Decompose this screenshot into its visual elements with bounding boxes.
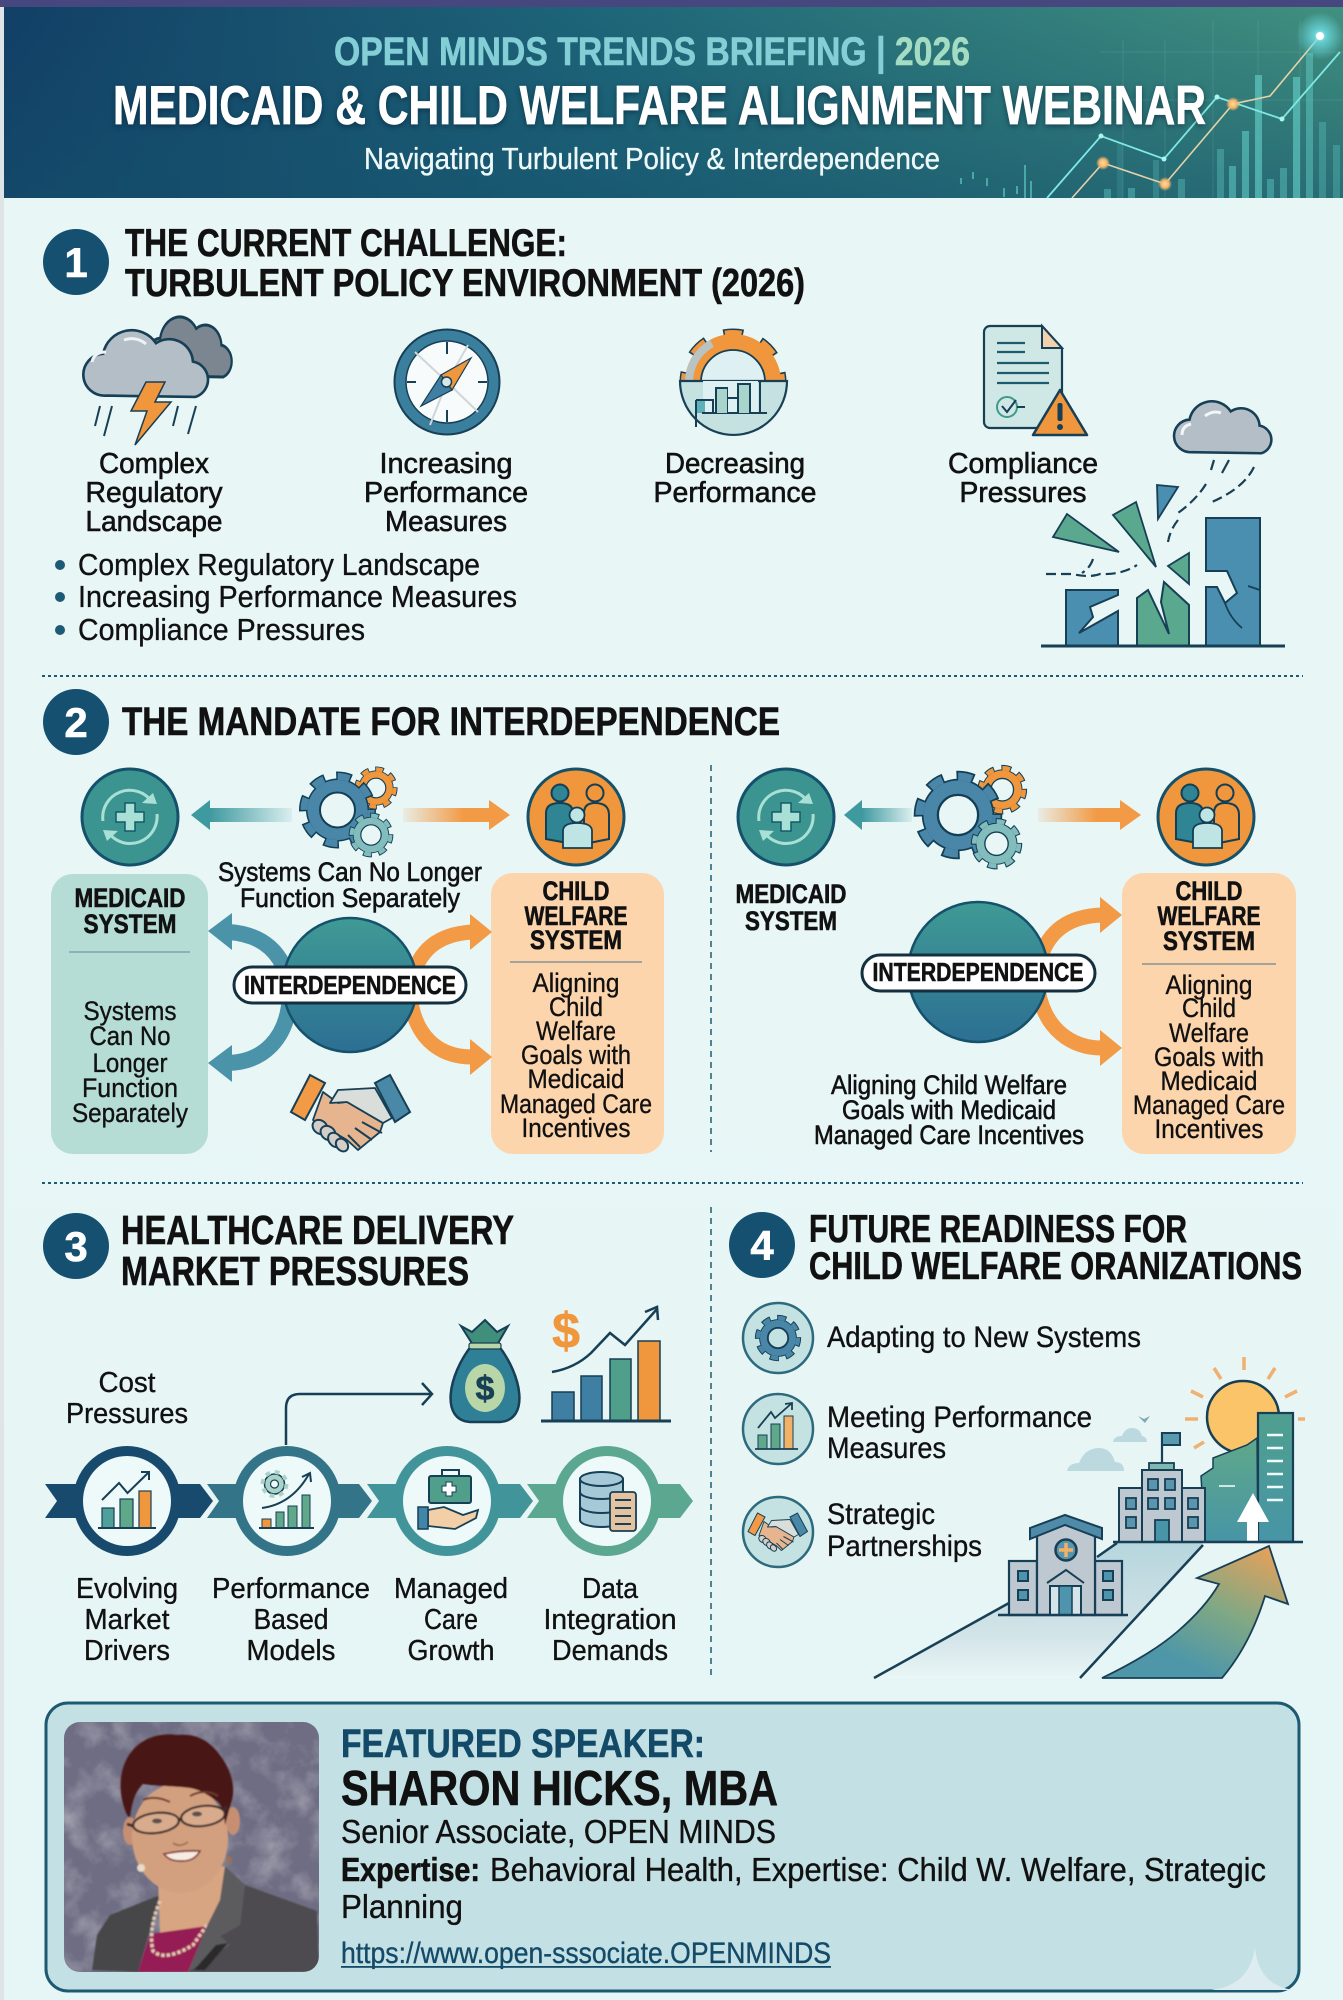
icon: compass xyxy=(394,330,500,434)
arrow to medicaid xyxy=(844,800,912,830)
caption: systems can no longer function separately: Function Separately xyxy=(240,883,460,913)
icon: child welfare circle xyxy=(528,769,624,865)
panel: child welfare system: CHILD xyxy=(1176,876,1242,906)
step labels xyxy=(76,1573,676,1667)
label: medicaid system xyxy=(736,879,846,936)
right diagram xyxy=(736,768,1296,1154)
panel: child welfare system: SYSTEM xyxy=(1163,926,1255,956)
section 4 number badge: 4 xyxy=(750,1222,774,1269)
label: decreasing performance: Decreasing xyxy=(665,448,805,480)
panel: child welfare system: Child xyxy=(1182,993,1236,1023)
big rising arrow xyxy=(1102,1546,1288,1678)
tall tower xyxy=(1258,1413,1293,1542)
connector arrow xyxy=(286,1383,432,1445)
header eyebrow: OPEN MINDS TRENDS BRIEFING | 2026 xyxy=(334,30,970,74)
label: medicaid system: MEDICAID xyxy=(736,879,846,909)
panel: child welfare system: CHILD xyxy=(542,876,610,906)
section 1 heading xyxy=(125,222,805,305)
text: adapting to new systems: Adapting to New Systems xyxy=(827,1321,1141,1354)
label: increasing performance measures: Performance xyxy=(364,477,528,509)
panel: child welfare system: SYSTEM xyxy=(530,925,622,955)
section 1 number badge xyxy=(43,229,109,295)
step labels: Managed xyxy=(394,1573,508,1605)
section 4: future readiness xyxy=(729,1208,1305,1678)
caption: aligning goals: Goals with Medicaid xyxy=(842,1095,1056,1125)
label: increasing performance measures xyxy=(364,448,528,538)
label: decreasing performance xyxy=(654,448,816,509)
panel: child welfare system: Incentives xyxy=(1154,1114,1264,1144)
section 3 heading xyxy=(121,1207,514,1294)
panel: child welfare system: Medicaid xyxy=(528,1064,624,1094)
icon: handshake xyxy=(291,1075,410,1154)
step: data integration demands xyxy=(558,1451,656,1551)
step labels: Growth xyxy=(408,1635,494,1667)
icon: medicaid circle xyxy=(738,769,834,865)
header chart decoration xyxy=(960,12,1343,198)
bullet list xyxy=(55,547,517,647)
section 3 heading: MARKET PRESSURES xyxy=(121,1248,469,1294)
section 2 number badge: 2 xyxy=(64,699,88,746)
arrow to child welfare xyxy=(1038,800,1141,830)
step labels: Evolving xyxy=(76,1573,178,1605)
icon: handshake badge xyxy=(743,1497,813,1567)
section 3: market pressures xyxy=(43,1207,693,1667)
panel: medicaid system: Can No xyxy=(90,1021,170,1051)
section 2: mandate for interdependence xyxy=(43,689,1296,1154)
chart: rising bars with dollar xyxy=(541,1303,671,1421)
label: compliance pressures xyxy=(948,448,1098,509)
icon: money bag xyxy=(451,1320,519,1422)
step labels: Performance xyxy=(212,1573,370,1605)
step labels: Care xyxy=(424,1604,478,1636)
header banner xyxy=(0,0,1343,198)
panel: child welfare system: Welfare xyxy=(1169,1018,1249,1048)
section 4 heading xyxy=(809,1208,1302,1288)
hub sphere with label: INTERDEPENDENCE xyxy=(244,970,456,1000)
speaker details: Behavioral Health, Expertise: Child W. Welfare, Strategic xyxy=(490,1851,1266,1888)
icon: gauge with bars xyxy=(680,334,787,435)
label: increasing performance measures: Increasing xyxy=(380,448,512,480)
section 1 number badge: 1 xyxy=(64,239,88,286)
bullet list: Increasing Performance Measures xyxy=(78,579,517,614)
step labels: Data xyxy=(582,1573,639,1605)
bullet list: Compliance Pressures xyxy=(78,612,365,647)
label: complex regulatory landscape: Complex xyxy=(99,448,209,480)
text: strategic partnerships xyxy=(827,1498,982,1563)
hub arrows xyxy=(1038,897,1122,1066)
panel: child welfare system: WELFARE xyxy=(1158,901,1260,931)
panel: child welfare system xyxy=(491,873,664,1154)
arrow to medicaid xyxy=(191,800,292,830)
hub sphere with label: INTERDEPENDENCE xyxy=(872,957,1084,987)
caption: aligning goals xyxy=(814,1070,1084,1150)
speaker details: https://www.open-sssociate.OPENMINDS xyxy=(341,1937,831,1970)
step labels: Market xyxy=(84,1604,170,1636)
caption: aligning goals: Aligning Child Welfare xyxy=(831,1070,1067,1100)
sun xyxy=(1185,1357,1305,1453)
panel: featured speaker xyxy=(46,1703,1299,1991)
text: meeting performance measures: Meeting Performance xyxy=(827,1401,1092,1434)
label: cost pressures: Pressures xyxy=(66,1398,188,1430)
label: increasing performance measures: Measures xyxy=(385,506,507,538)
panel: child welfare system xyxy=(1122,873,1296,1154)
panel: child welfare system: Medicaid xyxy=(1160,1066,1258,1096)
section 2 heading: THE MANDATE FOR INTERDEPENDENCE xyxy=(122,700,780,744)
label: compliance pressures: Compliance xyxy=(948,448,1098,480)
panel: medicaid system: SYSTEM xyxy=(84,909,176,939)
speaker details: Expertise: xyxy=(341,1851,480,1888)
icon: gear badge xyxy=(743,1303,813,1373)
panel: medicaid system: MEDICAID xyxy=(74,883,186,913)
icon: storm cloud xyxy=(83,317,232,445)
panel: child welfare system: WELFARE xyxy=(524,901,628,931)
speaker details xyxy=(341,1722,1266,1970)
text: meeting performance measures: Measures xyxy=(827,1432,946,1465)
panel: child welfare system: Incentives xyxy=(522,1113,630,1143)
icon: gears xyxy=(919,768,1024,866)
panel: medicaid system: Function xyxy=(82,1073,178,1103)
panel: medicaid system: Separately xyxy=(72,1098,188,1128)
panel: medicaid system xyxy=(51,874,208,1154)
panel: child welfare system: Managed Care xyxy=(1133,1090,1285,1120)
label: complex regulatory landscape xyxy=(86,448,223,538)
road xyxy=(874,1543,1203,1678)
panel: medicaid system: Longer xyxy=(92,1048,168,1078)
label: cost pressures: Cost xyxy=(98,1367,156,1399)
section 3 number badge xyxy=(43,1213,109,1279)
subtitle: Navigating Turbulent Policy & Interdependence xyxy=(364,141,940,176)
speaker photo xyxy=(64,1722,319,1972)
chart: rising bars with dollar: $ xyxy=(552,1303,580,1359)
step labels: Drivers xyxy=(84,1635,170,1667)
panel: child welfare system: Managed Care xyxy=(500,1089,652,1119)
panel: child welfare system: Welfare xyxy=(536,1016,616,1046)
illustration: growth path to city xyxy=(874,1357,1305,1678)
section 1 heading: THE CURRENT CHALLENGE: xyxy=(125,222,567,265)
section 1 heading: TURBULENT POLICY ENVIRONMENT (2026) xyxy=(125,262,805,305)
section 4 number badge xyxy=(729,1212,795,1278)
panel: child welfare system: Goals with xyxy=(1154,1042,1264,1072)
speaker details: Planning xyxy=(341,1888,463,1925)
label: complex regulatory landscape: Regulatory xyxy=(86,477,223,509)
step labels: Demands xyxy=(552,1635,668,1667)
label: compliance pressures: Pressures xyxy=(960,477,1086,509)
text: meeting performance measures xyxy=(827,1401,1092,1465)
icon: child welfare circle xyxy=(1158,769,1254,865)
label: medicaid system: SYSTEM xyxy=(745,906,837,936)
icon: compliance document with warning xyxy=(984,326,1087,435)
speaker details: FEATURED SPEAKER: xyxy=(341,1722,705,1766)
panel: child welfare system: Child xyxy=(549,992,603,1022)
speaker details: SHARON HICKS, MBA xyxy=(341,1762,778,1816)
label: decreasing performance: Performance xyxy=(654,477,816,509)
section 3 heading: HEALTHCARE DELIVERY xyxy=(121,1207,514,1253)
decorative corner mark xyxy=(1212,1947,1293,1990)
panel: child welfare system: Aligning xyxy=(1166,970,1252,1000)
step: evolving market drivers xyxy=(78,1451,176,1551)
caption: aligning goals: Managed Care Incentives xyxy=(814,1120,1084,1150)
step labels: Models xyxy=(246,1635,336,1667)
text: strategic partnerships: Strategic xyxy=(827,1498,935,1531)
hub sphere with label xyxy=(862,902,1095,1042)
panel: child welfare system: Aligning xyxy=(532,968,620,998)
office building xyxy=(1119,1432,1205,1542)
panel: medicaid system: Systems xyxy=(84,996,176,1026)
icon: shattered bar chart under cloud xyxy=(1041,401,1285,646)
step labels: Integration xyxy=(544,1604,676,1636)
clinic building xyxy=(998,1515,1128,1615)
section 3 number badge: 3 xyxy=(64,1223,88,1270)
caption: systems can no longer function separately: Systems Can No Longer xyxy=(218,857,482,887)
step labels: Based xyxy=(254,1604,328,1636)
icon: medicaid circle xyxy=(82,769,178,865)
hub sphere with label xyxy=(234,918,466,1052)
caption: systems can no longer function separately xyxy=(218,857,482,913)
step: performance based models xyxy=(238,1451,336,1551)
panel: child welfare system: Goals with xyxy=(521,1040,631,1070)
icon: money bag: $ xyxy=(476,1370,495,1408)
icon: gears xyxy=(304,769,395,854)
process ribbon xyxy=(45,1451,693,1551)
label: complex regulatory landscape: Landscape xyxy=(86,506,222,538)
speaker details: Senior Associate, OPEN MINDS xyxy=(341,1813,776,1850)
clouds and bird xyxy=(1067,1416,1150,1471)
bullet list: Complex Regulatory Landscape xyxy=(78,547,480,582)
section 1: the current challenge xyxy=(43,222,1285,647)
green hill xyxy=(1201,1438,1258,1542)
interdependence hub arrows xyxy=(208,913,492,1082)
arrow to child welfare xyxy=(403,800,510,830)
label: cost pressures xyxy=(66,1367,188,1430)
left diagram xyxy=(51,769,664,1154)
section 4 heading: FUTURE READINESS FOR xyxy=(809,1208,1187,1251)
step: managed care growth xyxy=(398,1451,496,1551)
icon: chart badge xyxy=(743,1394,813,1464)
white up arrow xyxy=(1237,1493,1269,1542)
section 2 number badge xyxy=(43,689,109,755)
text: strategic partnerships: Partnerships xyxy=(827,1530,982,1563)
